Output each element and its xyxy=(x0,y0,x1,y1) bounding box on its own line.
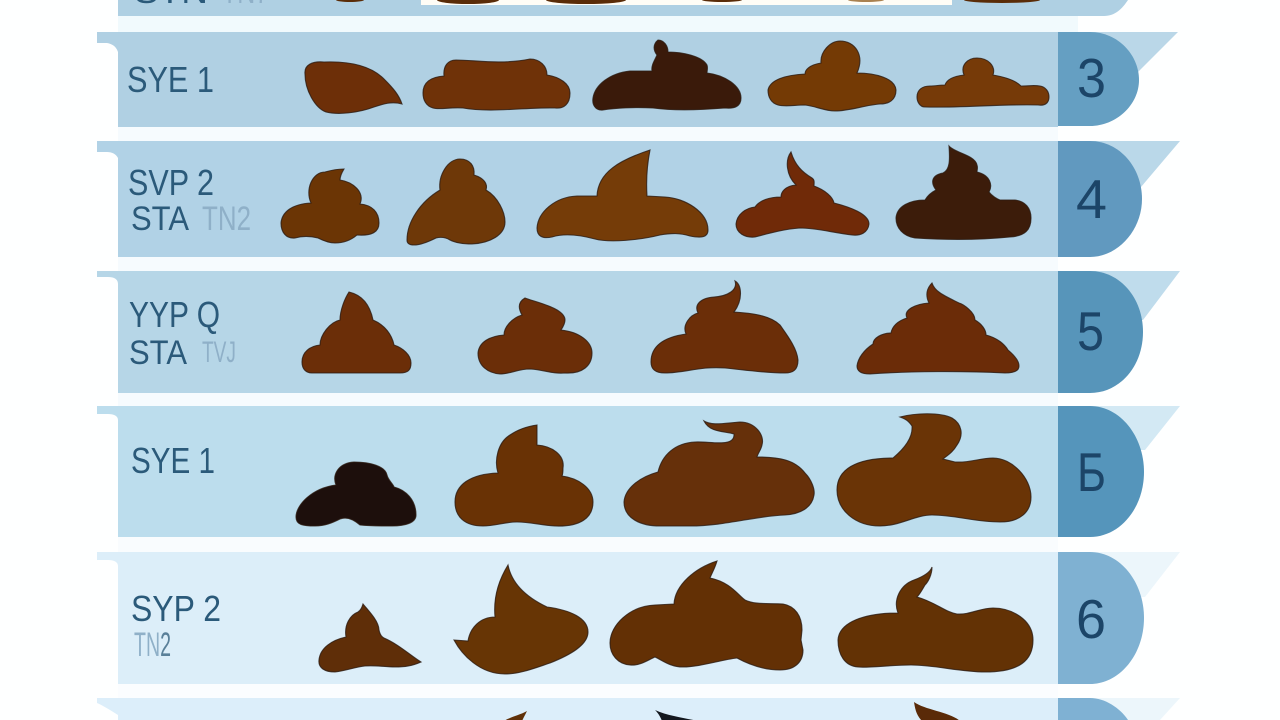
number badge 4 xyxy=(1058,141,1142,257)
icon: stool 4 xyxy=(838,567,1033,672)
icon: clipped stool tip 1 xyxy=(504,711,527,720)
icon: stool 1 xyxy=(302,292,411,373)
icon: stool 1 xyxy=(305,62,402,113)
number badge 5: 5 xyxy=(1077,300,1104,362)
icon: stool 1 xyxy=(296,462,416,526)
row: 4 xyxy=(97,141,1180,257)
icon: stool 3 xyxy=(537,150,708,241)
number badge: clipped xyxy=(1058,698,1128,720)
icon: stool 2 xyxy=(407,159,505,245)
number badge 5 xyxy=(1058,271,1143,393)
label: SYE 1: SYE 1 xyxy=(127,59,214,100)
icon: stool 1 xyxy=(319,604,421,672)
number badge Б: Б xyxy=(1077,441,1106,503)
icon: stool 3 xyxy=(610,561,803,670)
row: 6 xyxy=(97,552,1180,684)
icon: stool 2 xyxy=(423,59,570,110)
icon: stool 1 xyxy=(281,169,379,243)
label: YYP Q: YYP Q xyxy=(129,294,220,335)
label: STA: STA xyxy=(129,334,187,372)
number badge Б xyxy=(1058,406,1144,537)
icon: stool 3 xyxy=(624,421,814,526)
icon: stool 3 xyxy=(651,281,798,373)
icon: clipped stool tip 3 xyxy=(914,702,960,720)
icon: stool 3 xyxy=(593,40,741,110)
icons: clipped stool shapes xyxy=(336,0,1040,4)
row: 3 xyxy=(97,32,1178,127)
icon: stool 5 xyxy=(896,146,1031,239)
row: clipped top row xyxy=(118,0,1128,16)
row: 6 variant xyxy=(97,406,1180,537)
icon: stool 2 xyxy=(455,425,593,526)
label: SYP 2: SYP 2 xyxy=(131,588,221,629)
icon: stool 2 xyxy=(454,565,588,674)
number badge 4: 4 xyxy=(1076,168,1107,230)
label: faint TN2: TN2 xyxy=(134,626,171,664)
number badge 6 xyxy=(1058,552,1144,684)
icon: clipped stool tip 2 xyxy=(655,710,698,720)
icon: stool 5 xyxy=(917,58,1049,107)
icon: stool 4 xyxy=(837,414,1031,526)
row: clipped bottom row xyxy=(97,698,1180,720)
label: SYE 1: SYE 1 xyxy=(131,440,215,481)
label: SVP 2: SVP 2 xyxy=(128,162,214,203)
icon: stool 4 xyxy=(768,41,896,111)
icon: stool 2 xyxy=(478,298,592,374)
icon: stool 4 xyxy=(857,283,1019,374)
icon: stool 4 xyxy=(736,152,869,237)
number badge 6: 6 xyxy=(1076,588,1106,650)
number badge 3 xyxy=(1058,32,1139,126)
label: STA TN2: STA xyxy=(131,200,189,238)
label: faint TN2: TN2 xyxy=(202,200,251,238)
label: faint TVJ: TVJ xyxy=(202,336,236,369)
number badge 3: 3 xyxy=(1077,47,1106,109)
row: 5 xyxy=(97,271,1180,393)
